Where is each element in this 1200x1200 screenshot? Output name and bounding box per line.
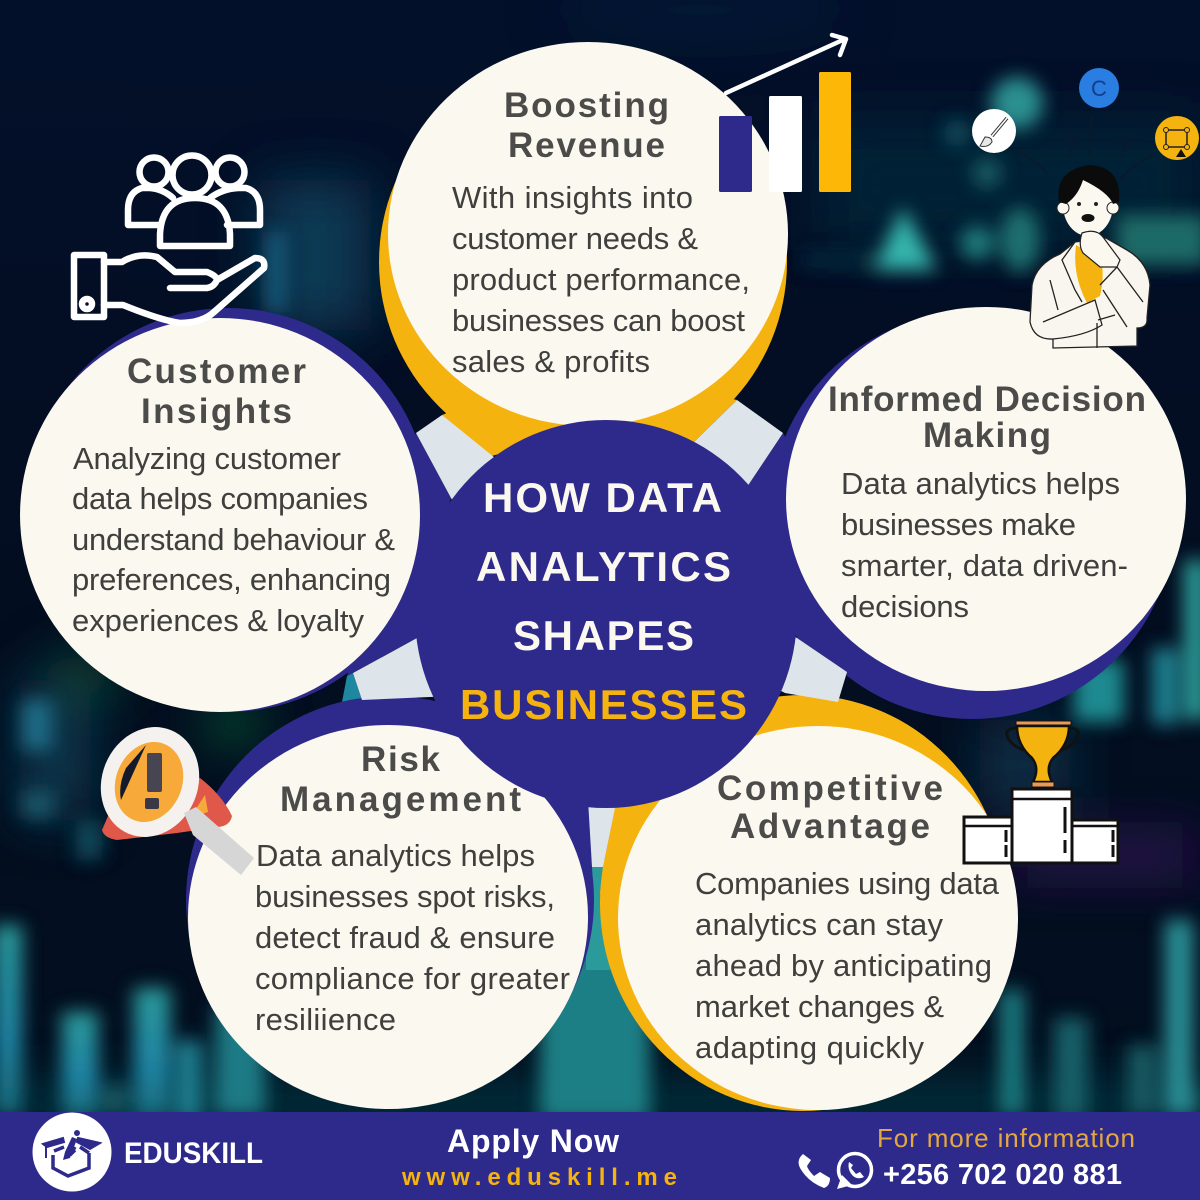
icon: copyright bubble: C (1091, 76, 1107, 101)
panel: risk management (188, 725, 588, 1109)
title: BUSINESSES (460, 681, 747, 728)
text: risk management body: resiliience (255, 1002, 396, 1037)
text: boosting revenue body: sales & profits (452, 344, 650, 379)
text: boosting revenue body: With insights into (452, 180, 693, 215)
icon: magnifying glass with warning (85, 712, 254, 875)
text: competitive advantage body: analytics can stay (695, 907, 944, 942)
text: customer insights body: experiences & loyalty (72, 603, 364, 638)
text: risk management body: detect fraud & ensure (255, 920, 555, 955)
icon: brush bubble (972, 109, 1016, 153)
text: risk management body (255, 838, 570, 1037)
phone number: +256 702 020 881 (883, 1159, 1122, 1191)
panel: boosting revenue (388, 42, 788, 426)
title: HOW DATA (483, 474, 722, 521)
text: competitive advantage body: ahead by anticipating (695, 948, 992, 983)
heading: risk management: Risk (361, 740, 441, 779)
heading: informed decision making (828, 380, 1146, 455)
heading: customer insights: Customer (127, 352, 306, 391)
text: competitive advantage body: market changes & (695, 989, 944, 1024)
text: risk management body: Data analytics helps (256, 838, 535, 873)
icon: phone and whatsapp (799, 1154, 872, 1189)
icon: shape tool bubble (1155, 116, 1199, 160)
heading: informed decision making: Informed Decision (828, 380, 1146, 419)
icon: rising bar chart with arrow (719, 35, 851, 192)
icon: hand holding people (74, 156, 264, 323)
hub connector bands (353, 400, 847, 867)
heading: competitive advantage (717, 769, 943, 846)
text: boosting revenue body: customer needs & (452, 221, 698, 256)
icon: thinking person with option bubbles: ? (1115, 132, 1132, 165)
heading: boosting revenue: Boosting (504, 86, 669, 125)
icon: thinking person with option bubbles (972, 68, 1199, 348)
brand name: EDUSKILL (124, 1137, 263, 1170)
title: SHAPES (513, 612, 694, 659)
heading: boosting revenue: Revenue (508, 126, 665, 165)
heading: customer insights: Insights (141, 392, 292, 431)
text: informed decision body: decisions (841, 589, 969, 624)
text: customer insights body: Analyzing customer (73, 441, 341, 476)
heading: customer insights (127, 352, 306, 431)
footer bar (0, 1112, 1200, 1200)
title: ANALYTICS (476, 543, 731, 590)
panel: customer insights (20, 318, 420, 712)
text: risk management body: compliance for greater (255, 961, 570, 996)
text: boosting revenue body: businesses can boost (452, 303, 745, 338)
text: informed decision body: businesses make (841, 507, 1076, 542)
heading: risk management: Management (280, 780, 521, 819)
text: risk management body: businesses spot risks, (255, 879, 555, 914)
text: boosting revenue body: product performance, (452, 262, 750, 297)
text: informed decision body: smarter, data driven- (841, 548, 1128, 583)
heading: risk management (280, 740, 521, 819)
panel: informed decision making (786, 307, 1186, 691)
text: customer insights body: data helps companies (72, 481, 368, 516)
heading: competitive advantage: Advantage (730, 807, 930, 846)
text: competitive advantage body: Companies using data (695, 866, 1000, 901)
title (460, 474, 747, 728)
panel: competitive advantage (618, 726, 1018, 1110)
text: customer insights body (72, 441, 395, 638)
heading: informed decision making: Making (923, 416, 1051, 455)
center title circle (415, 420, 797, 808)
for more information: For more information (877, 1123, 1135, 1153)
logo (32, 1112, 112, 1192)
icon: trophy on podium (964, 721, 1118, 863)
text: customer insights body: understand behaviour & (72, 522, 395, 557)
heading: competitive advantage: Competitive (717, 769, 943, 808)
text: boosting revenue body (452, 180, 750, 379)
text: informed decision body: Data analytics helps (841, 466, 1120, 501)
text: competitive advantage body (695, 866, 1000, 1065)
apply now: Apply Now (447, 1123, 619, 1159)
text: competitive advantage body: adapting quickly (695, 1030, 924, 1065)
text: customer insights body: preferences, enhancing (72, 562, 391, 597)
website: www.eduskill.me (401, 1164, 677, 1191)
text: informed decision body (841, 466, 1128, 624)
icon: thinking person with option bubbles: ? (1062, 132, 1079, 165)
heading: boosting revenue (504, 86, 669, 165)
icon: copyright bubble (1079, 68, 1119, 108)
